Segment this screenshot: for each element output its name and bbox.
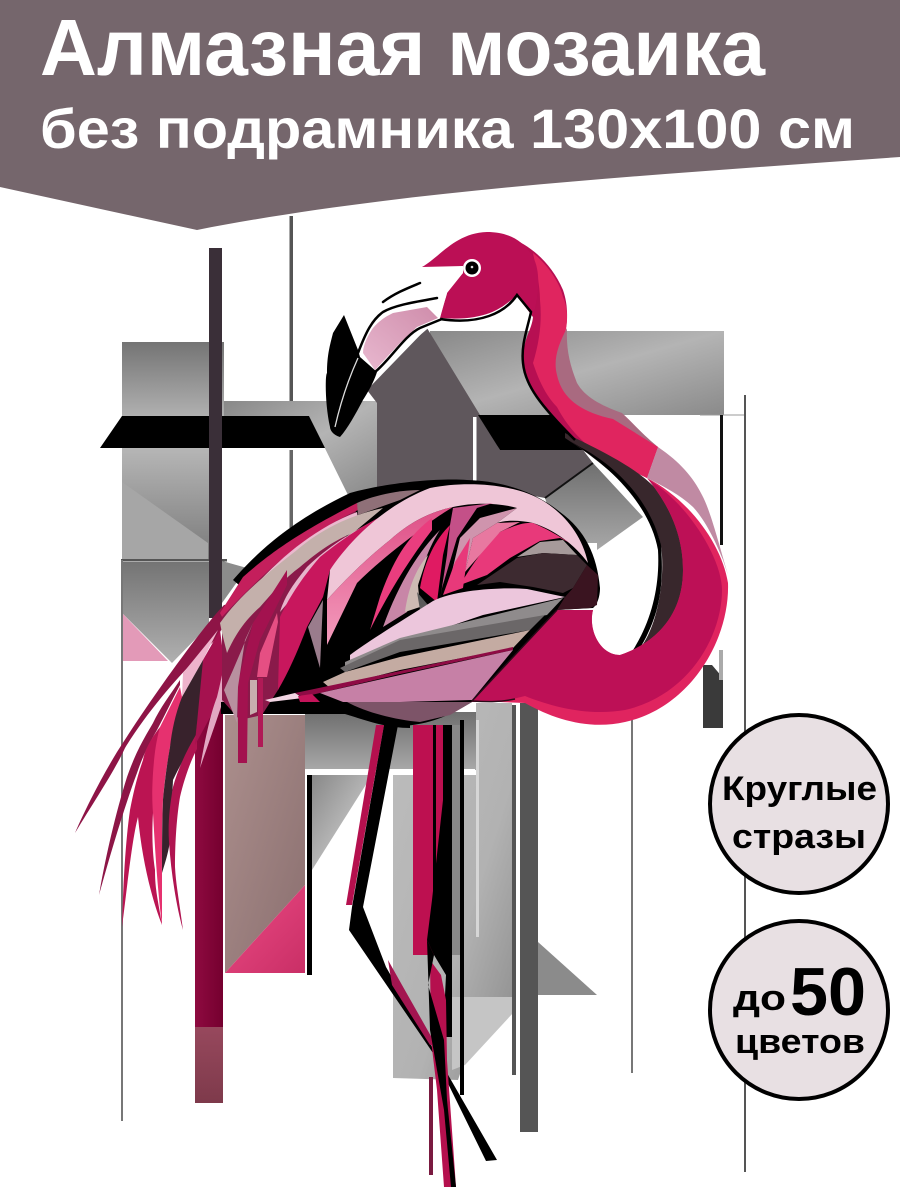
- feather: crimson center blade: [420, 525, 450, 602]
- badge text: стразы: [732, 818, 866, 856]
- neck: crimson lower: [472, 479, 722, 712]
- black line: mauve rectangle: [307, 775, 312, 975]
- feather: pale long streak: [280, 512, 395, 612]
- feather: left underlay: [222, 505, 358, 720]
- feather: pale dome: [327, 484, 588, 600]
- feather: hot blade right: [443, 538, 470, 595]
- mauve vertical bar end: [195, 1027, 223, 1103]
- thin horizontal line: right: [700, 414, 745, 416]
- pink triangle: mauve rectangle: [225, 885, 305, 973]
- tail: hot pink plume: [152, 687, 182, 925]
- wing: dark gray stripe: [340, 615, 545, 672]
- feather: crimson edge: [220, 503, 358, 617]
- small dark block: right: [703, 665, 723, 728]
- tail feathers: [75, 603, 238, 930]
- feather: dark band: [477, 553, 587, 593]
- wing: gray stripe: [345, 598, 563, 668]
- gray block: upper right: [430, 331, 724, 415]
- tail: thin plume 2: [99, 680, 180, 895]
- beak: highlight: [335, 358, 358, 427]
- header banner: [0, 0, 900, 230]
- subtitle: без подрамника 130х100 см: [40, 97, 855, 160]
- small gray triangle: [222, 561, 247, 603]
- feather: gray chip: [417, 592, 428, 610]
- badge text: цветов: [735, 1023, 865, 1061]
- dark polygon: center: [367, 328, 593, 498]
- mauve rectangle: [225, 715, 305, 973]
- feather: gray swoosh: [517, 540, 577, 557]
- gray block: upper left: [122, 342, 224, 416]
- tail: crimson plume: [122, 727, 162, 927]
- feather: dusty blade: [447, 508, 517, 592]
- neck: mauve band: [647, 447, 728, 575]
- thin dark vertical: [512, 705, 516, 1075]
- badge text: Круглые: [722, 770, 877, 808]
- thin vertical line: left: [121, 560, 123, 1121]
- neck: hot pink outer: [472, 478, 728, 725]
- gray block: lower left: [122, 562, 209, 663]
- wing: tan stripe: [323, 630, 530, 688]
- tail: crimson upper: [195, 630, 225, 745]
- feather: dusty swoosh: [465, 522, 520, 572]
- gray block: center lower: [305, 712, 477, 770]
- banner shape: [0, 0, 900, 230]
- feather: mauve blade lower: [383, 530, 440, 627]
- background geometric composition: [100, 216, 746, 1172]
- head: eye: [463, 259, 481, 277]
- tail: right blade: [169, 733, 197, 930]
- gray block: left middle: [122, 448, 209, 560]
- jaw line: [440, 295, 575, 440]
- title: Алмазная мозаика: [40, 3, 765, 92]
- neck: hot pink upper: [533, 253, 658, 478]
- thin line: lower right: [631, 720, 633, 1073]
- feather: pink drape: [257, 613, 278, 677]
- white line: center: [473, 417, 476, 485]
- feather: mauve drape: [224, 623, 253, 723]
- head: crimson: [422, 232, 538, 319]
- neck: translucent mauve segment: [556, 328, 658, 447]
- leg: back crimson bar: [413, 725, 443, 955]
- feather: top mauve tip: [357, 490, 420, 515]
- long thin line: right: [744, 395, 746, 1172]
- thin vertical line: top: [290, 216, 293, 401]
- dark vertical bar: right: [520, 703, 538, 1132]
- wing: crimson line: [295, 647, 513, 697]
- flamingo: [75, 232, 728, 1187]
- gray triangle: lower right: [538, 942, 597, 995]
- feather: pink stripe: [327, 507, 453, 645]
- neck: crimson base: [500, 235, 658, 478]
- wing: pale tip: [265, 693, 303, 702]
- body: black bar under wing: [221, 702, 410, 728]
- feather: magenta blade: [440, 503, 493, 600]
- tail: pale strand: [200, 653, 230, 768]
- lighter lower polygon: [452, 997, 513, 1070]
- body: [220, 480, 600, 763]
- gray block: center band: [224, 401, 377, 495]
- badge text: до: [733, 977, 786, 1018]
- divider line: left block: [121, 559, 227, 562]
- feather: pale thin streak: [233, 512, 358, 612]
- wing: bottom dark stripe: [347, 702, 472, 722]
- badge text: [722, 770, 877, 856]
- crimson vertical bar: [195, 700, 223, 1027]
- badge: colours: [710, 921, 888, 1099]
- wing: crimson tip: [298, 694, 320, 702]
- gray triangle: lower center: [312, 775, 372, 870]
- gray block: lower right tall: [393, 703, 512, 1080]
- leg: crimson lower segment: [430, 960, 456, 1187]
- beak: pink: [363, 307, 438, 370]
- feather: crimson drip: [258, 678, 263, 747]
- gray triangle: left diagonal: [122, 482, 208, 560]
- neck: dark band: [565, 433, 684, 648]
- tail: thin plume 1: [75, 603, 238, 833]
- feather: tan blade: [405, 555, 428, 612]
- beak: black tip: [326, 315, 377, 437]
- badge: round rhinestones: [710, 715, 888, 893]
- pink triangle: left: [122, 613, 168, 661]
- feather: crimson big blade: [278, 517, 380, 690]
- tail: dark plume: [162, 660, 207, 873]
- body: black silhouette: [233, 480, 600, 726]
- wing and neck edge: [472, 610, 557, 702]
- neck and head: [326, 232, 728, 725]
- tail: pale streak: [182, 630, 218, 697]
- legs: [346, 720, 497, 1187]
- black bar: left: [100, 416, 325, 448]
- beak: black lines: [358, 283, 442, 372]
- leg: vertical black leg: [427, 725, 452, 1037]
- feather: crimson long strand: [238, 570, 287, 763]
- feather: gray spike: [308, 600, 323, 668]
- feather: hot blade: [370, 518, 432, 630]
- thin black line: right: [720, 415, 723, 545]
- black bar: center: [478, 415, 590, 450]
- feather: shoulder dark: [557, 565, 598, 610]
- feather: pink swoosh: [460, 523, 570, 585]
- beak: white: [344, 266, 463, 372]
- white stripe: [305, 769, 475, 775]
- black line: polygon edge: [545, 463, 593, 498]
- dark vertical bar: left: [209, 248, 222, 618]
- gray polygon: right of center: [545, 463, 643, 550]
- feather: tan band: [220, 508, 383, 653]
- wing: mauve stripe: [320, 650, 513, 702]
- wing: pale top stripe: [350, 588, 565, 660]
- badge text: [733, 954, 866, 1061]
- badge text: 50: [790, 954, 866, 1030]
- leg: bent black leg: [349, 725, 497, 1161]
